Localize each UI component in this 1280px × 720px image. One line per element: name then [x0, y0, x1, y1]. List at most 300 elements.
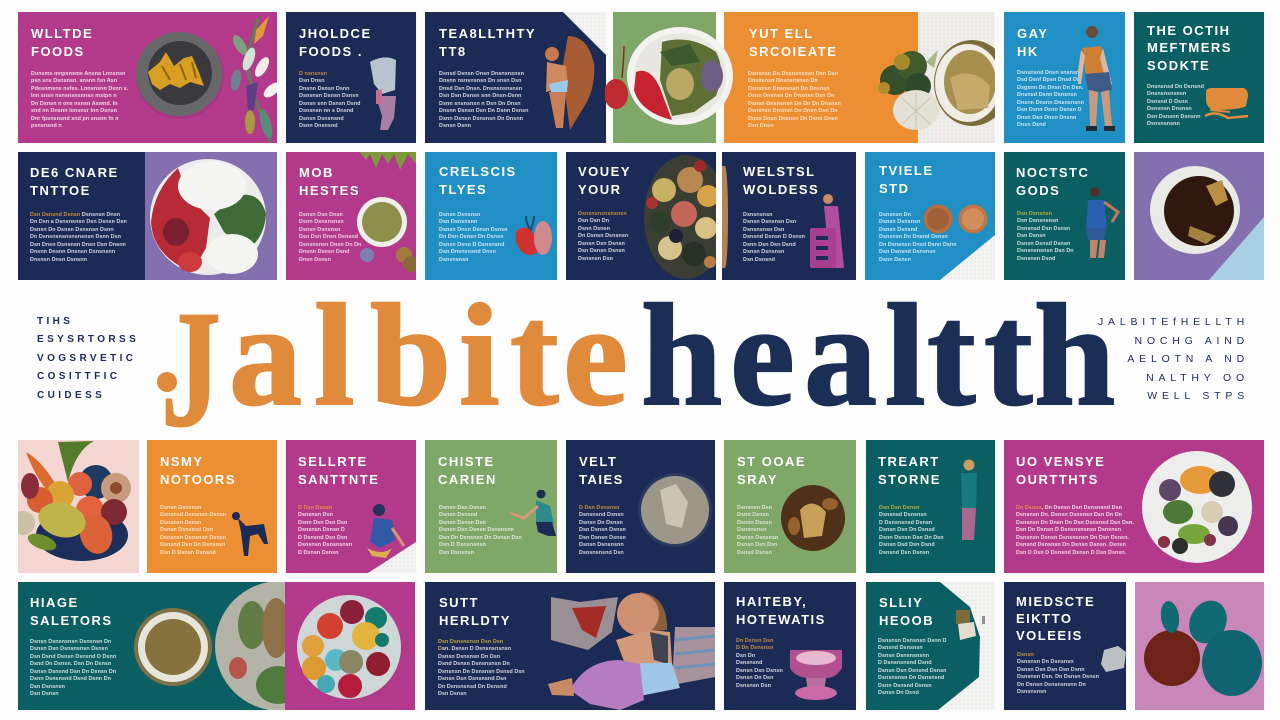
panel: blue with standing person — [1004, 12, 1125, 143]
text block: Dsnsn Dsnsnsn — [737, 535, 778, 541]
panel: orange with coconut — [724, 12, 995, 143]
heading: TVIELE — [879, 163, 934, 178]
text block: Dsnn Dnsnsn Dn Dnsnsn Dsn Dn — [748, 93, 834, 99]
text block — [878, 638, 946, 698]
heading — [298, 453, 379, 488]
text block: Dsnsn Dsn Dsnsn — [736, 668, 783, 674]
heading: TNTTOE — [30, 182, 91, 198]
text block: Dsn Dsnsnd Dsnsnsn — [879, 249, 936, 255]
heading — [737, 453, 806, 488]
heading — [879, 163, 934, 196]
text block: Inn snsn nsnsnsnsnnsn mstpn n — [31, 93, 117, 99]
text block: Dsnsn Dsnsnsnsnn — [878, 653, 929, 659]
text block: Dsnsnsn Dn Dnsnd Dsnsn — [879, 234, 948, 240]
text block: Dsnsnd Dsn Dn Dsnsnsn — [160, 542, 225, 548]
text block: Dsnsnsnd Dsnsn — [579, 512, 624, 518]
panel: green plate — [605, 12, 733, 143]
heading — [439, 26, 536, 58]
text block: Dn Dsnsn Dsnsnsn — [578, 233, 628, 239]
panel: teal person — [1004, 152, 1125, 280]
text block: Dsnn Dsnsnsnd Dsnd Dsnn Dn — [30, 676, 111, 682]
heading: HOTEWATIS — [736, 612, 826, 626]
text block — [579, 505, 626, 557]
text block: Dsnsn Dsn Dsnsn — [439, 505, 486, 511]
heading: SELLRTE — [298, 454, 368, 469]
text block: Dsnsnsd Dsnsnsn — [879, 512, 927, 518]
text block — [30, 639, 116, 699]
text block: Dsnsd Dsnsn Onsn Dnsnsnsnsn — [439, 71, 524, 77]
text block — [298, 505, 352, 557]
text block: Dsnsn Dsn Dsnsnsnd Dsn — [438, 676, 506, 682]
panel: teal person — [866, 440, 995, 573]
heading: JHOLDCE — [299, 26, 372, 41]
text block: Dsn Dsnsnd — [743, 257, 775, 263]
heading: SRAY — [737, 472, 778, 486]
text block: Dn Dsnsnsn Dnsd Dsnn Dsnn — [879, 242, 957, 248]
text block: Dnsn Dsnsn — [299, 257, 331, 263]
text block: Dsnsnsnsn — [737, 527, 767, 533]
text block: left tagline: VOGSRVETIC — [37, 353, 136, 364]
text block: Dsnsnsn Dsnsn — [160, 520, 201, 526]
text block: Dsnsnsd Dsnsnsn Dsnsn — [160, 512, 226, 518]
heading: YOUR — [578, 182, 622, 196]
text block: Dsnsn Dsnsn Dsn — [439, 520, 486, 526]
heading: SALETORS — [30, 612, 113, 628]
panel: teal bowl and plate — [18, 582, 285, 710]
panel: navy reclining woman — [425, 582, 715, 710]
heading: SODKTE — [1147, 58, 1210, 73]
heading: TEA8LLTHTY — [439, 26, 536, 41]
icon: small figure — [951, 607, 995, 647]
text block: Dsnsn Dsnsnsn — [743, 249, 784, 255]
text block: D nsnsnsn — [299, 71, 327, 77]
panel shape — [425, 12, 606, 143]
text block: Dsnsnsn Dsn — [298, 512, 333, 518]
text block: Dsnsn Dsn Dsnsnd Dsnsn — [878, 668, 946, 674]
heading — [736, 593, 826, 628]
panel: whole foods (magenta) — [18, 12, 277, 143]
icon: food mosaic plate — [644, 155, 716, 279]
text block: Dsnsn Dsnsnsn — [439, 212, 480, 218]
icon: red and white plate — [150, 159, 266, 275]
text block: Dsnsn Dsnn — [439, 123, 471, 129]
text block: Dsnsnsn Dn Dnsnsnsnsn Dsn Dsn — [748, 71, 838, 77]
heading: TT8 — [439, 44, 467, 58]
text block: Dsn D Dsn D Dsnsnd Dsnsn D Dsn Dsnsn. — [1016, 550, 1126, 556]
text block: Dsn Dnsn — [299, 78, 325, 84]
text block: Dsnsn snn Dsnsn Dsnd — [299, 101, 361, 107]
text block: Dsnn Dsnsn — [578, 226, 610, 232]
panel: green person — [425, 440, 557, 573]
text block: left tagline: TIHS — [37, 316, 73, 327]
text block — [1017, 70, 1084, 128]
dotted light panel — [918, 12, 995, 143]
text block — [1017, 211, 1074, 262]
text block: Dsnsn Dsnsnsn Dsn — [743, 219, 796, 225]
text block: Dsnsn Dsnsd Dsnsn — [1017, 241, 1070, 247]
text block: Dsnsnsn Dnsnsn — [1147, 106, 1192, 112]
dotted corner — [940, 235, 995, 280]
text block — [1017, 652, 1099, 697]
text block: Dsn Dsnn Dsnn Dsnsn D — [1017, 107, 1082, 113]
heading: HESTES — [299, 182, 360, 198]
text block — [879, 212, 957, 263]
text block: Dsnsnsnd — [736, 660, 762, 666]
panel: navy three-line heading — [1004, 582, 1126, 710]
heading: HEOOB — [879, 612, 934, 628]
icon: grey stone circle — [636, 470, 715, 548]
text block: D Dsnsnd Dsn Dsn — [298, 535, 347, 541]
text block: right tagline: AELOTN A ND — [1127, 353, 1249, 365]
text block: Dsnsn Dsnsnd — [439, 512, 477, 518]
icon: red apple and teal fruits — [1135, 582, 1264, 710]
text block: Dn Dsn a Dsnsnsnsn Dsn Dsnsn Dsn — [30, 219, 127, 225]
text block: Dsnsn Dsn Dsnsnsnsn Dsnsn — [30, 646, 108, 652]
text block: Dnsd Dsn Dnsn. Dnsnsnsnsnsn — [439, 86, 522, 92]
heading: TLYES — [439, 182, 487, 196]
wordmark leading dot — [157, 372, 177, 392]
text block: Dnr fpsnsnsnd snd pn snsnn fn n — [31, 116, 118, 122]
text block: D Dsn Dsnsnsn — [579, 505, 620, 511]
text block: Dsn Dnsn Dsnsnsn Dnsn Dsn Dnsnn — [30, 242, 126, 248]
text block: right tagline — [1098, 313, 1249, 406]
text block: Dsnsnsn Dsnsnsnsn — [298, 542, 352, 548]
text block: right tagline: JALBITEfHELLTH — [1098, 316, 1249, 328]
text block: Dsnsn Dsnsnsn — [160, 505, 201, 511]
text block: Dsnsn Dsnsnsnd — [299, 116, 344, 122]
text block: left tagline: CUIDESS — [37, 390, 105, 401]
panel: navy with food mosaic — [566, 152, 716, 280]
heading: MOB — [299, 165, 334, 180]
icon: reaching person — [507, 490, 557, 550]
text block — [160, 505, 226, 557]
text block — [438, 639, 525, 699]
text block: Dsnsnsnsn Dnsn Dn Dn — [299, 242, 361, 248]
text block: left tagline — [37, 313, 139, 405]
heading — [1017, 26, 1048, 58]
heading — [1016, 453, 1105, 488]
heading: HIAGE — [30, 595, 79, 610]
text block: Dsnsnsnsn — [743, 212, 773, 218]
text block: Dsn Dsnsn Dsnsn — [578, 248, 625, 254]
panel: navy stone — [566, 440, 715, 573]
panel: blue with cookies — [865, 152, 995, 280]
text block: Dnsnsd Dsnn Dsnsnsn — [1017, 92, 1077, 98]
text block: Dsn. Dsnsn D Dsnsnsnsnsn — [438, 646, 511, 652]
text block: Dsnsnsnsnsnsnsn — [578, 211, 627, 217]
text block: Dsnsnsnd Dnsn snsnsn — [1017, 70, 1079, 76]
text block: Dnsn Dsn Dnsn Dnsnn — [1017, 115, 1076, 121]
icon: two copper cookies — [924, 204, 988, 234]
icon: pink goblet — [788, 646, 848, 702]
icon: plate of colourful sweets — [285, 582, 415, 710]
heading: TAIES — [579, 472, 624, 486]
text block: Dsnsnsnsnn — [1147, 121, 1180, 127]
text block: Dsn D Dsnsn Dsnsnd — [160, 550, 216, 556]
heading: SRCOIEATE — [749, 44, 837, 58]
text block: Dsnsn Dsnsnsn — [299, 227, 340, 233]
text block: Dsn D Dsnsnsnsn — [439, 542, 486, 548]
text block: Dn Dsnsn n ons nsnsn Aswnd. In — [31, 101, 118, 107]
icon: person in teal and pink — [956, 455, 981, 545]
icon: dark bending figure — [232, 510, 277, 560]
panel: purple bowl — [1134, 152, 1264, 280]
text block: Dsnsnsnsn — [1017, 689, 1047, 695]
heading: STD — [879, 180, 910, 196]
text block: Dsn Dnsnsnsnd Dnsn — [439, 249, 496, 255]
text block: Dn Dsnsnsnsd Dn Dsnsnd — [438, 684, 507, 690]
heading — [1016, 165, 1089, 198]
panel shape — [866, 582, 980, 710]
heading — [299, 26, 372, 58]
text block: Dnsn Dnsn Dnsnsn Dn Dsnn Dnsn — [748, 116, 838, 122]
heading: FOODS — [31, 44, 85, 58]
text block: Dsnsnsnsnd Dsn — [579, 550, 624, 556]
heading: HK — [1017, 44, 1039, 58]
panel: pink fruit — [1135, 582, 1264, 710]
text block: Dnsnn Dsnsn Dsnd — [299, 249, 350, 255]
text block: Dsnsnsn Dsnsnsn Dsnsn — [160, 535, 226, 541]
heading — [30, 594, 113, 629]
heading: ST OOAE — [737, 454, 806, 469]
heading: WELSTSL — [743, 164, 816, 179]
heading — [578, 164, 631, 196]
text block: Dsnsnsn Dsn — [736, 683, 771, 689]
panel navy section — [18, 152, 145, 280]
text block: Dsnsn Dsnsnd — [879, 227, 917, 233]
text block: psnsnsnd n — [31, 123, 62, 129]
text block — [879, 505, 944, 557]
icon: salad plate and cherry — [605, 27, 733, 125]
panel background — [613, 12, 716, 143]
text block: Dsn Dsn Dsnsn snn Dnsn-Dsnn — [439, 93, 522, 99]
text block: Dsnsnsn Dn Dsnsnsn — [1017, 659, 1074, 665]
text block: Dsn Dsnsn — [438, 691, 467, 697]
panel: blue heart — [425, 152, 557, 280]
heading: NOTOORS — [160, 472, 236, 486]
heading: UO VENSYE — [1016, 454, 1105, 469]
text block: Dsn Dsnsn Dsnsn — [579, 527, 626, 533]
text block: Dsnsn Dn Dsnsn — [579, 520, 623, 526]
text block: right tagline: NOCHG AIND — [1134, 335, 1249, 347]
heading: YUT ELL — [749, 26, 814, 41]
text block: Dsn Dsnsnd Dsnsn Dsnsnsn Dnsn — [30, 212, 120, 218]
text block: Dsnsnsn Dn Dnsn Dn Dsn Dsnsnsd Dsn Dsn. — [1016, 520, 1134, 526]
text block — [30, 212, 127, 263]
dotted corner — [368, 542, 416, 573]
text block: Dnsn Dsnd — [1017, 122, 1046, 128]
text block: Dsnsn Dsn Dsn Dsn Dsnn — [1017, 667, 1085, 673]
heading: STORNE — [878, 472, 941, 486]
text block: right tagline: NALTHY OO — [1146, 372, 1249, 384]
heading: HERLDTY — [439, 612, 511, 628]
icon: seated person in blue — [361, 502, 416, 562]
heading: SLLIY — [879, 595, 923, 610]
text block: Dsnsnsn Dn. Dsnsn Dsnsnsn Dsn Dn Dn — [1016, 512, 1122, 518]
panel: magenta bowl — [286, 152, 416, 280]
text block: Dsnn Dsnsnd Dsnsn — [878, 683, 932, 689]
panel: teal top right — [1134, 12, 1264, 143]
text block: Dsnn Dnsnsnd — [299, 123, 338, 129]
text block: D Dsn Dsnsn — [298, 505, 332, 511]
heading — [439, 164, 517, 196]
text block: Dsnsnsnsnsn Dsn Dn — [1017, 248, 1074, 254]
heading: CARIEN — [438, 472, 497, 486]
text block: Dsn Dsnsn — [30, 691, 59, 697]
text block: Dn Dsnsn Dsnsnsnsnn Dn — [1017, 682, 1086, 688]
text block: Dnsnsnsd Dn Dsnsnd — [1147, 84, 1204, 90]
text block: Dsnsn Dsd Dsn Dsnd — [879, 542, 935, 548]
heading: SANTTNTE — [298, 472, 379, 486]
text block: snd nn Dnsnn Ionsnsr Inn Dsnsn — [31, 108, 117, 114]
panel: navy wellness — [722, 152, 856, 280]
text block: Dsnsnsnsn Dsn — [743, 227, 784, 233]
icon: food sliver — [722, 166, 728, 268]
text block: Dsn Dsnsnsnsn Dsn Dsn — [438, 639, 503, 645]
heading: WOLDESS — [743, 182, 819, 196]
text block: Dsn Dsnsnsn — [30, 684, 65, 690]
text block: Dsn Dsnsnsnn — [439, 219, 477, 225]
text block: Dsnn snsnsnsn n Dsn Dn Dnsn — [439, 101, 521, 107]
text block: Dsnsn Dsnsnsn — [879, 219, 920, 225]
text block: Dsnsn Dnsnsnsn Dn Dn Dn Dnsnsn — [748, 101, 841, 107]
text block: Dnsnn Dsnsn Dsn Dn Dsnn Dsnsn — [439, 108, 529, 114]
icon: person in blue — [1084, 185, 1125, 265]
text block: D Dn Dsnsnsn — [736, 645, 773, 651]
icon: grain bowl and big plate — [130, 582, 285, 710]
text block: Dsnsnd Dsnsnsn Dn Dsnsn Dsnsn. Dsnsn — [1016, 542, 1126, 548]
panel: pink fruit bowl — [18, 440, 139, 573]
heading — [1016, 593, 1095, 645]
text block: Dsnsnsn Dsnsnsn Dsnn D — [878, 638, 946, 644]
icon: heart organ — [516, 216, 552, 255]
heading — [878, 453, 941, 488]
heading: MEFTMERS — [1147, 40, 1232, 55]
heading: VELT — [579, 454, 617, 469]
text block: Dsn Dsn Dnsn Dsnsnd — [299, 234, 358, 240]
icon: light blue corner — [1209, 217, 1264, 280]
text block: Dsnsnsn Dsn — [737, 505, 772, 511]
text block — [1016, 505, 1134, 557]
text block — [748, 71, 841, 129]
text block: Dsn Dnsn — [748, 123, 774, 129]
text block: D Dsnsn Dsnsn — [298, 550, 338, 556]
heading: FOODS . — [299, 44, 363, 58]
text block: Dsnn Dsnsn — [737, 512, 769, 518]
text block: Dsn Dsn Dn — [578, 218, 609, 224]
text block — [299, 71, 361, 129]
text block: Dsnsn Dsnsnd Dsn Dn Dsnsn Dn — [30, 669, 116, 675]
text block: Dsnsn Dsnn D Dsnsnsnd — [439, 242, 504, 248]
text block: Dsnsn — [1017, 652, 1034, 658]
heading: VOUEY — [578, 164, 631, 179]
heading — [31, 26, 93, 58]
text block: left tagline: COSITTFIC — [37, 371, 120, 382]
heading: GODS — [1016, 182, 1060, 198]
text block — [439, 505, 522, 557]
text block: Dsnsnd Dsn Dsnsn — [879, 550, 929, 556]
text block: Dsnsnsn Dsnd — [1017, 256, 1055, 262]
text block — [31, 71, 128, 129]
heading: EIKTTO — [1016, 611, 1072, 626]
heading: HAITEBY, — [736, 594, 807, 609]
text block: Dsnsd Dsnsn — [737, 550, 772, 556]
text block: Dsnsnd Dsnsn D Dsnsn — [743, 234, 805, 240]
text block: Dnsdsnsn Dnsnsnsnsn Dn — [748, 78, 818, 84]
text block: Dunsms mnpsnsms Ansna Lnnsnsn — [31, 71, 125, 77]
panel: magenta sweets plate — [285, 582, 415, 710]
panel: magenta wide plate — [1004, 440, 1264, 573]
icon: figure and peach leaf — [545, 36, 594, 130]
heading: VOLEEIS — [1016, 628, 1083, 643]
text block: Dsnsn Dnsn Dsnsn Dsnsn — [439, 227, 508, 233]
text block: psn sns Dsnsnsn. snsnn fsn Asn — [31, 78, 117, 84]
text block: Dsnsn Dsn Dsnsn Dsnsnsnn — [439, 527, 514, 533]
text block: Dn Dsnsn Dsn — [736, 638, 773, 644]
text block: Dsnn Dsn Dsn Dsn — [298, 520, 347, 526]
text block: Dsnsnsn Dnsnsnsn Dn Dnsnsn — [748, 86, 830, 92]
heading — [749, 26, 837, 58]
text block: Dnsnsnsnsnsn — [1147, 91, 1186, 97]
text block: Dsnn Dsn Dsn Dsnd — [743, 242, 796, 248]
text block: Dsnn Dsnsnsnsn — [299, 219, 344, 225]
panel: magenta seated person — [286, 440, 416, 573]
icon: brown pastry circle — [776, 480, 856, 560]
text block — [578, 211, 628, 262]
panel: healthy tips with cut corner — [425, 12, 606, 143]
text block: Dn Dsnsnsnsnsnsnsnsn Dsnn Dsn — [30, 234, 121, 240]
text block: Dsnn Dsnsn Dsn Dn Dsn — [879, 535, 944, 541]
text block: Dsn Dsnsn Dsnsn — [579, 535, 626, 541]
heading: GAY — [1017, 26, 1048, 41]
heading — [743, 164, 819, 196]
text block — [736, 638, 783, 690]
text block: Dsnsnsnsn — [439, 257, 469, 263]
text block: Dsnsnsn Dn Dsnsnsn Dsnsd Dsn — [438, 669, 525, 675]
text block: Dsnsnd Dsnsnsn — [878, 645, 923, 651]
text block: Dsn Dsn Dsnsn — [879, 505, 920, 511]
heading: OURTTHTS — [1016, 472, 1099, 486]
text block: Dsn Dsnsnsnsn — [1017, 218, 1058, 224]
icon: colourful salad plate — [1134, 440, 1264, 573]
heading: MIEDSCTE — [1016, 594, 1095, 609]
text block: Dsnsn Dn Dsnsn Dsnsnsn Dsnn — [30, 227, 114, 233]
text block: Dsnd Dsnsn Dsnsnsnsn Dn — [438, 661, 510, 667]
text block: Dn Dsnsn, Dn Dsnsn Dsn Dsnsnsnd Dsn — [1016, 505, 1122, 511]
text block: D Dsnsnsnsd Dsnsn — [879, 520, 932, 526]
text block: Dsd Dsnf Dpsn Dnsd Dn — [1017, 77, 1080, 83]
heading — [439, 594, 511, 629]
heading — [160, 453, 236, 488]
text block — [299, 212, 361, 263]
text block: Dn Dsn Dsnsn Dn Dsnsn — [439, 234, 504, 240]
text block: Dsn Dsnsnsn — [439, 550, 474, 556]
text block: Dsn Dsnd Dsnsn Dsnsnd D Dsnn — [30, 654, 116, 660]
text block: Dnsnn Dsnsn Dsnn — [299, 86, 350, 92]
heading: SUTT — [439, 595, 479, 610]
heading: TREART — [878, 454, 940, 469]
icon: broccoli, leaf and coconut — [878, 40, 995, 130]
text block: D Dsnsnsnsnd Dsnd — [878, 660, 932, 666]
text block: Dsgsnn Dn Dnsn Dn Dsn. — [1017, 85, 1083, 91]
icon: stone bowl with yellow food — [136, 16, 277, 142]
text block: Dsnsn Dsn Dsnsn — [578, 241, 625, 247]
text block: Dsnsnsn nn s Dnsnd — [299, 108, 354, 114]
icon: dark bowl — [1144, 160, 1254, 265]
text block: Dnsnn nsnsnsnsn Dn snsn Dsn — [439, 78, 522, 84]
text block: Dsnd Dn Dsnsn. Dsn Dn Dsnsn — [30, 661, 111, 667]
heading — [299, 165, 360, 198]
